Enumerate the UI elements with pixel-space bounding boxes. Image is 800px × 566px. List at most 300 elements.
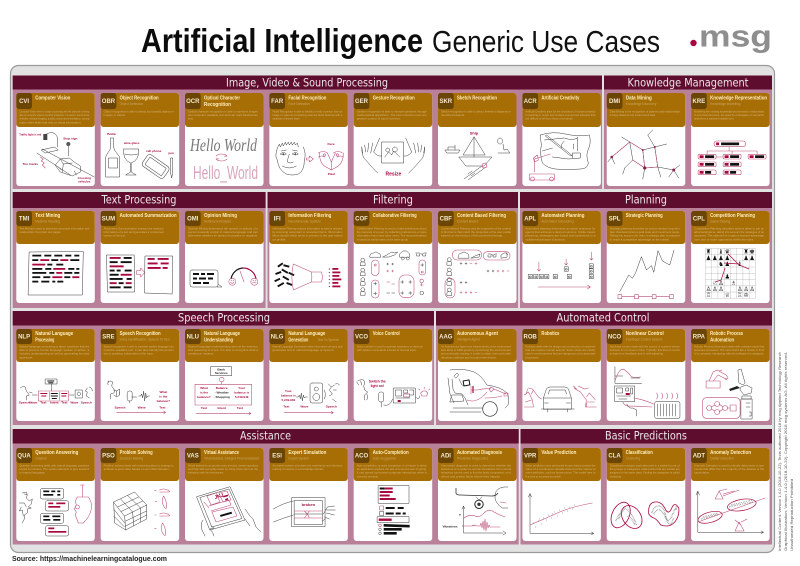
title — [141, 22, 660, 59]
illustration: chess board: ♜ — [706, 249, 711, 256]
card heading: GER — [354, 93, 432, 127]
illustration: chess board: ♚ — [749, 249, 755, 256]
card heading: APL: Automated Planning — [541, 213, 585, 219]
card heading: ESI: making of experts in a knowledge domain. — [272, 467, 324, 471]
section: Speech Processing: Speech Processing — [178, 311, 270, 325]
card heading: FAR: FAR — [271, 99, 284, 105]
card: Auto-Completion — [354, 448, 432, 541]
card heading: NLU: Natural language understanding aims at the intention — [188, 344, 258, 348]
card heading: NLP: NLP — [18, 334, 30, 340]
card heading: GER: GER — [355, 99, 369, 105]
illustration: intent recognition: Services — [215, 371, 228, 375]
card heading: NCO: Nonlinear Control — [626, 331, 664, 337]
illustration: speech to text: is the — [159, 394, 168, 398]
illustration: speech to text: Wave — [138, 406, 146, 410]
card heading: ESI: Expert System — [288, 456, 309, 460]
illustration: intent recognition: Your — [238, 386, 246, 390]
illustration: chess board: ♗ — [731, 280, 736, 287]
illustration: street scene: Stop sign — [63, 136, 77, 140]
card heading: VAS: and help with everyday tasks by using voice input as the — [188, 467, 258, 471]
illustration: intent recognition: is the — [200, 390, 208, 394]
illustration: bottle, glass, phone, pen: cell phone — [146, 149, 162, 153]
card heading: ACO: ACO — [355, 454, 368, 460]
illustration: text to speech: Text — [283, 404, 289, 408]
card heading: OCR: into computer readable text and can read handwritten — [188, 113, 258, 117]
illustration: nonlinear control circuit — [615, 367, 680, 418]
card heading: ADT — [691, 448, 770, 481]
card heading: SRE: machine-readable text. It can also identify the person — [104, 348, 174, 352]
card heading: SPL: Taking into account the risks, a strategic plan is prepared — [610, 234, 680, 238]
card heading: COF — [354, 211, 432, 244]
card heading: SUM: version of the text. — [104, 234, 126, 238]
illustration: intent recognition: Text — [237, 406, 243, 410]
card heading: SUM: Automated Summarization extracts the essence — [104, 226, 164, 230]
section: Automated Control: Automated Control — [556, 311, 650, 325]
card heading: NLP: Natural language processing is about machines that are — [19, 344, 90, 348]
card: Autonomous Agent — [438, 329, 516, 421]
card heading: SPL: to reach a competitive advantage on the market. — [610, 237, 670, 241]
card heading: SRE: Speech Recognition — [120, 331, 161, 337]
card: Information Filtering — [269, 211, 348, 303]
card heading: SPL: Strategic Planning — [626, 213, 663, 219]
card heading: ACO: correctly predicts. — [357, 474, 379, 478]
card heading: TMI — [16, 211, 95, 244]
section: Image, Video & Sound Processing — [13, 75, 602, 189]
card heading: SKR: SKR — [439, 99, 453, 105]
card heading: RPA: Automation — [710, 337, 735, 343]
card heading: QUA: Question answering deals with natural language questions — [19, 464, 90, 468]
card: Robotic Process Automation — [691, 329, 770, 421]
card heading: GER: mathematical algorithms. The most common uses are — [357, 113, 427, 117]
card heading: ADI: detect and predict faults before they happen. — [441, 474, 501, 478]
card heading: TMI: TMI — [19, 216, 30, 222]
card heading: CLA: Clustering — [626, 456, 640, 460]
illustration: chess board: ♟ — [725, 261, 730, 268]
illustration: chatbot conversation — [19, 485, 91, 536]
section: Text Processing — [13, 192, 266, 308]
card heading: OBR: OBR — [102, 99, 116, 105]
illustration: regression chart — [528, 494, 594, 535]
card heading: NCO: behavior is non-linear in time. Typically, this kind of control — [610, 348, 680, 352]
title: Generic Use Cases — [432, 24, 660, 59]
card heading: VAS: Virtual Assistant, Intelligent Personal Assistant — [204, 456, 259, 460]
card heading: ACO: Auto-Completion — [373, 450, 409, 456]
illustration: intent recognition: 5,249.94€ — [235, 395, 249, 399]
card heading: VCO: Voice Control — [373, 331, 400, 337]
illustration: intent recognition: balance is — [234, 390, 249, 394]
card heading: CBF: CBF — [440, 216, 452, 222]
card heading: CVI: CVI — [19, 99, 29, 105]
card heading: CLA: CLA — [608, 454, 621, 460]
card heading: VAS: VAS — [187, 454, 199, 460]
card heading: VCO — [354, 329, 432, 362]
card: Automated Planning — [522, 211, 601, 303]
card heading: FAR: Face Detection — [288, 102, 310, 106]
card heading: QUA: in natural language. — [19, 471, 45, 475]
illustration: text to speech: balance is — [281, 394, 296, 398]
illustration: chess board: ♙ — [743, 286, 749, 293]
illustration: chess board: ♜ — [743, 249, 749, 256]
card heading: DMI: Data Mining — [626, 96, 652, 102]
card heading: NLU — [185, 329, 264, 362]
illustration: bottle, glass, phone, pen: pen — [168, 151, 174, 155]
illustration: speech pipeline: Speech — [19, 400, 30, 404]
illustration: chess board: ♘ — [712, 280, 717, 287]
card heading: SRE: Voice Identification, Speech To Text — [120, 338, 170, 342]
card heading: NLG: Text To Speech — [317, 338, 339, 342]
card heading: CVI: Computer Vision refers to image processing with the objective of being — [19, 110, 89, 114]
card: Question Answering — [16, 448, 95, 541]
illustration: anomaly chart — [696, 489, 765, 534]
card heading: OMI: Opinion Mining — [204, 213, 237, 219]
card heading: ACO — [354, 448, 432, 481]
side copyright note: Graphical Illustration: Version 1.4.0 (2018-10-22). Copyright 2018 msg systems AG. All rights reserved. — [783, 352, 788, 551]
card heading: ADI: Predictive Diagnostics — [457, 456, 489, 460]
card heading: AAG — [438, 329, 516, 362]
card heading: SPL — [607, 211, 685, 244]
card heading: CBF — [438, 211, 516, 244]
illustration: vibration diagnosis: T — [459, 513, 461, 517]
card heading: ROB: that can replace human actions. Such robots are mostly — [525, 348, 596, 352]
illustration: face to mesh — [276, 142, 343, 176]
card heading: FAR: image or video by comparing selected facial features with a — [272, 113, 343, 117]
card heading: CBF: Content Based — [457, 220, 478, 224]
card heading: PSO: achieve a goal state based on an initial situation. — [104, 467, 170, 471]
illustration: chess board — [705, 248, 755, 299]
card heading: FAR: database of known faces. — [272, 117, 300, 121]
illustration: intent recognition: Balance — [216, 386, 228, 390]
illustration: autonomous car — [448, 369, 509, 416]
card heading: CPL: Competition Planning describes actions taken to win an — [694, 226, 764, 230]
card heading: APL: multidimensional space of decisions. — [525, 237, 566, 241]
illustration: ship sketch: Ship — [470, 132, 479, 136]
card heading: CLA: assigned to the same class. Finding the categories is called — [610, 471, 680, 475]
card heading: VAS: Virtual assistants can provide many services, answer questions — [188, 464, 258, 468]
illustration: speech pipeline: Wave — [29, 400, 38, 404]
illustration: face to mesh: Face — [328, 142, 335, 146]
card heading: AAG: Autonomous Agent — [457, 331, 498, 337]
illustration: chess board: ♞ — [718, 261, 724, 268]
card heading: VPR: value of a continuous variable based on the values of — [525, 467, 596, 471]
card heading: ESI: Expert Simulation — [288, 450, 327, 456]
card heading: OCR: Optical Character — [204, 96, 241, 102]
card: Natural Language Generation — [269, 329, 348, 421]
card: Computer Vision — [16, 93, 95, 186]
illustration: speech pipeline: Intent — [50, 400, 59, 404]
section: Speech Processing — [13, 311, 434, 425]
card heading: CPL: Game Playing — [710, 220, 730, 224]
illustration: bottle, glass, phone, pen — [106, 132, 174, 180]
card heading: NCO: is based on feedback and is self-adjusting. — [610, 352, 664, 356]
card heading: CLA: the groups or categories. Data points that are similar are — [610, 467, 680, 471]
card heading: OMI: Opinion Mining determines the opinion or attitude of a — [188, 226, 258, 230]
card heading: NLU: NLU — [187, 334, 199, 340]
illustration: bottle, glass, phone, pen: Bottle — [107, 132, 116, 136]
card: Natural Language Understanding — [185, 329, 264, 421]
illustration: text to speech: Your — [285, 389, 293, 393]
card heading: APL: planning, strategies are found and optimized in a — [525, 234, 596, 238]
illustration: Hello World handwriting: Hello_World — [193, 163, 258, 184]
card heading: FAR: Facial Recognition — [288, 96, 327, 102]
illustration: speech bubble and sentiment gauge — [190, 268, 258, 287]
card heading: IFI: by removing redundant or unwanted items. Information — [272, 230, 343, 234]
card heading: ROB: Robotics — [541, 331, 559, 337]
card heading: KRE: in a formal structure, as used by ontologies or semantic — [694, 113, 765, 117]
illustration: x-ray diagnosis: broken — [302, 502, 316, 507]
card heading: NLP — [16, 329, 95, 362]
illustration: chess board: ♟ — [706, 255, 711, 262]
card heading: GER: Gesture recognition is able to interpret gestures through — [357, 110, 427, 114]
card heading: AAG: decisions without any human intervention. — [441, 355, 497, 359]
card heading: RPA: Robotic Process — [710, 331, 743, 337]
card heading: ESI: ESI — [272, 454, 282, 460]
card heading: NLP: Processing — [35, 337, 55, 343]
card heading: CLA: clustering. — [610, 474, 622, 478]
card heading: IFI: on profile. — [272, 237, 286, 241]
card heading: VPR: Value prediction uses previously known data to predict the — [525, 464, 596, 468]
card heading: ROB: Robotics deals with the design and construction of machines — [525, 344, 596, 348]
card heading: SPL: SPL — [609, 216, 621, 222]
card heading: COF: Collaborative Filtering — [373, 213, 417, 219]
card: Facial Recognition — [269, 93, 348, 186]
card heading: NCO: Feedback Control System — [626, 338, 663, 342]
card heading: NLU: sentence means. — [188, 352, 214, 356]
card heading: ADT: Outlier Detection — [710, 456, 734, 460]
card heading: SUM: SUM — [102, 216, 115, 222]
card heading: APL: Automated planning determines an action sequence for — [525, 226, 595, 230]
illustration: chess board: ♙ — [737, 286, 742, 293]
illustration: chess board: ♟ — [712, 255, 717, 262]
card: Natural Language Processing — [16, 329, 95, 421]
illustration: robot arm painting — [529, 133, 590, 181]
illustration: chess board: ♙ — [718, 280, 724, 287]
card heading: CVI: able to recognize objects and their properties. It is used in autonomous — [19, 113, 90, 117]
card heading: DMI: DMI — [609, 99, 620, 105]
illustration: blocks planning — [528, 252, 593, 289]
card heading: CPL — [691, 211, 770, 244]
card heading: ACR — [522, 93, 601, 127]
card heading: OMI: person towards a topic in natural language and can — [188, 230, 258, 234]
illustration: face to mesh: Pixel — [328, 172, 335, 176]
card heading: SRE: who is speaking, independent of the voice. — [104, 352, 154, 356]
card heading: ROB: used in environments that are dangerous or to automate — [525, 352, 596, 356]
card: Artificial Creativity — [522, 93, 601, 186]
card heading: TMI: Text Mining is used to determine structured information and — [19, 226, 90, 230]
card heading: SRE: Speech recognition is able to translate spoken language into — [104, 344, 174, 348]
illustration: classification clusters — [607, 499, 679, 532]
card heading: ROB: ROB — [524, 334, 538, 340]
illustration: intent recognition: Text — [201, 406, 207, 410]
illustration: speech to text: Speech — [115, 406, 126, 410]
illustration: information funnel — [274, 262, 341, 290]
card heading: APL — [522, 211, 601, 244]
card heading: OCR: Recognition — [204, 102, 231, 108]
card heading: OBR: Object recognition is able to detect and classify objects in — [104, 110, 174, 114]
illustration: intent recognition: Intent — [217, 406, 226, 410]
card heading: DMI: Data Mining is the recognition of patterns and relationships — [610, 110, 680, 114]
card: Collaborative Filtering — [354, 211, 432, 303]
card heading: CVI — [16, 93, 95, 127]
card: Expert Simulation — [269, 448, 348, 541]
illustration: chess board: ♙ — [749, 286, 755, 293]
card heading: VCO: with spoken commands instead of manual input. — [357, 348, 417, 352]
illustration: intent recognition: - Shopping — [214, 395, 230, 399]
card heading: FAR — [269, 93, 348, 127]
card heading: VPR: other attributes, such as house prices. The model tries to — [525, 471, 596, 475]
illustration: voice controlled light: Switch the — [369, 380, 386, 384]
card heading: OBR: Object Recognition — [120, 96, 159, 102]
card heading: QUA: QUA — [17, 454, 31, 460]
section: Assistance: Assistance — [240, 429, 291, 443]
illustration: Hello World handwriting — [189, 135, 258, 184]
card: Text Mining — [16, 211, 95, 303]
illustration: street scene: vehicles — [78, 180, 91, 184]
card: Competition Planning — [691, 211, 770, 303]
card heading: QUA: Chatbot — [35, 456, 47, 460]
card heading: NCO: NCO — [608, 334, 622, 340]
card heading: OCR: Optical character recognition is able to transform images — [188, 110, 258, 114]
source note: Source: https://machinelearningcatalogue.com — [12, 554, 167, 563]
card heading: AAG: and aims to fulfill goals by perceiving the environment — [441, 348, 511, 352]
card heading: NLG: Natural Language Generation takes information as input and — [272, 344, 343, 348]
side copyright note — [777, 352, 794, 551]
illustration: content matrix — [445, 250, 510, 298]
card heading: COF: COF — [355, 216, 368, 222]
illustration: intent recognition — [195, 367, 252, 415]
card heading: SUM: Automated Summarization — [120, 213, 177, 219]
card heading: DMI: in large datasets and unstructured data. — [610, 113, 656, 117]
card heading: ADI: behaviour can be used to find the faulty component, or to — [441, 471, 511, 475]
illustration: text to speech: Wave — [300, 404, 309, 408]
card heading: APL: APL — [524, 216, 537, 222]
card heading: NLG: generates text in natural language or speech. — [272, 348, 334, 352]
section: Basic Predictions: Basic Predictions — [605, 429, 687, 443]
illustration: street scene — [19, 132, 94, 184]
card heading: FAR: Facial Recognition is able to identify or verify a person from an — [272, 110, 343, 114]
card heading: ADI: ADI — [441, 454, 451, 460]
section: Image, Video & Sound Processing: Image, Video & Sound Processing — [226, 75, 388, 89]
card heading: CPL: opponent. The objective is to gain a decisive advantage — [694, 234, 764, 238]
card heading: NLG: NLG — [271, 334, 284, 340]
side copyright note: Unauthorized Reproduction Prohibited — [789, 479, 794, 551]
card heading: KRE: KRE — [693, 99, 705, 105]
card heading: PSO: PSO — [102, 454, 115, 460]
card heading: RPA: of a computer, interacting with the software it is assigned. — [694, 352, 764, 356]
card heading: SKR — [438, 93, 516, 127]
card: Nonlinear Control — [607, 329, 685, 421]
card heading: CVI: vehicles, medical imaging, quality control and surveillance, among — [19, 117, 90, 121]
card heading: ADT: Anomaly Detection — [710, 450, 752, 456]
illustration: chess board: ♟ — [725, 255, 730, 262]
card heading: OMI: OMI — [187, 216, 199, 222]
illustration: chess board: ♟ — [749, 255, 755, 262]
illustration: chess board: ♟ — [725, 274, 730, 280]
card heading: PSO — [101, 448, 179, 481]
card heading: OBR: Object Detection — [120, 102, 143, 106]
card heading: CBF: to find items that match the properties of the user profile — [441, 230, 511, 234]
illustration: robot working on computer — [702, 369, 752, 419]
card: Speech Recognition — [101, 329, 179, 421]
illustration: strategy line chart — [618, 250, 674, 299]
illustration: knowledge tree — [698, 141, 766, 175]
card heading: CVI: many other fields that rely on visual information. — [19, 120, 81, 124]
illustration: car factory robots — [524, 386, 596, 412]
card heading: QUA — [16, 448, 95, 481]
card heading: RPA: Robotic Process Automation deals with software robots that — [694, 344, 764, 348]
section: Filtering: Filtering — [373, 192, 413, 206]
illustration: speech pipeline: Wave — [70, 400, 79, 404]
card heading: VAS — [185, 448, 264, 481]
card: Object Recognition — [101, 93, 179, 186]
card heading: PSO: Decision Making — [120, 456, 143, 460]
illustration: network graph — [608, 130, 680, 179]
card heading: PSO: Problem Solving — [120, 450, 153, 456]
card heading: OCR: OCR — [186, 99, 200, 105]
card: Problem Solving — [101, 448, 179, 541]
card heading: IFI: IFI — [274, 216, 281, 222]
card heading: OBR: images or videos. — [104, 113, 126, 117]
card heading: ADI — [438, 448, 516, 481]
illustration: chess board: ♟ — [743, 255, 749, 262]
card heading: IFI: Information Filtering reduces information to what is relevant — [272, 226, 342, 230]
illustration: chess board: ♖ — [706, 292, 711, 299]
card heading: NLG: Generation — [288, 337, 309, 343]
card heading: CVI: Computer Vision — [35, 96, 71, 102]
card heading: NLU: Natural Language — [204, 331, 240, 337]
card heading: AAG: AAG — [439, 334, 453, 340]
illustration: chess board: ♟ — [718, 255, 724, 262]
card: Gesture Recognition — [354, 93, 432, 186]
illustration: intent recognition: Bank — [217, 368, 225, 372]
card heading: CPL: CPL — [693, 216, 705, 222]
logo: msg: msg — [699, 18, 772, 54]
illustration: chess board: ♙ — [712, 286, 717, 293]
card heading: SKR: sketched objects. — [441, 113, 465, 117]
card heading: QUA: Question Answering — [35, 450, 79, 456]
card heading: NCO: Nonlinear control deals with the control of systems whose — [610, 344, 680, 348]
section: Text Processing: Text Processing — [101, 192, 176, 206]
card heading: NCO — [607, 329, 685, 362]
card: Knowledge Representation — [691, 93, 770, 186]
card heading: TMI: Text Mining — [35, 213, 61, 219]
illustration: tablet with virtual assistant: JKJ — [214, 493, 225, 501]
card heading: VPR: Value Prediction — [541, 450, 577, 456]
illustration: bottle, glass, phone, pen: wine glass — [123, 141, 140, 145]
section: Automated Control — [436, 311, 772, 425]
illustration: vibration diagnosis — [442, 487, 508, 535]
illustration: text to speech: Speech — [326, 404, 337, 408]
card: Strategic Planning — [607, 211, 685, 303]
card heading: SUM: information of a text and generates a condensed — [104, 230, 164, 234]
illustration: collaborative matrix — [360, 251, 427, 298]
card: Optical Character Recognition — [185, 93, 264, 186]
illustration: speech pipeline: Text — [61, 400, 67, 404]
card heading: ACO: Auto-Suggestion — [373, 456, 396, 460]
title: Artificial Intelligence — [141, 22, 423, 59]
card heading: COF: is based on similar users of the same group. — [357, 237, 409, 241]
card: Robotics — [522, 329, 601, 421]
section: Planning: Planning — [625, 192, 667, 206]
illustration: intent recognition: - Weather — [215, 390, 230, 394]
section: Filtering — [268, 192, 518, 308]
card heading: PSO: Problem solving deals with reasoning about a strategy to — [104, 464, 174, 468]
card heading: ADI: Automated Diagnosis — [457, 450, 502, 456]
card heading: VAS: Virtual Assistance — [204, 450, 239, 456]
card heading: KRE: Modelling the existing knowledge and semantic relationships — [694, 110, 764, 114]
illustration: street scene: Traffic light is red — [19, 132, 41, 136]
illustration: text to speech: 5,249.94€ — [281, 398, 296, 402]
card heading: ESI: An expert system simulates the experience and decision — [272, 464, 343, 468]
